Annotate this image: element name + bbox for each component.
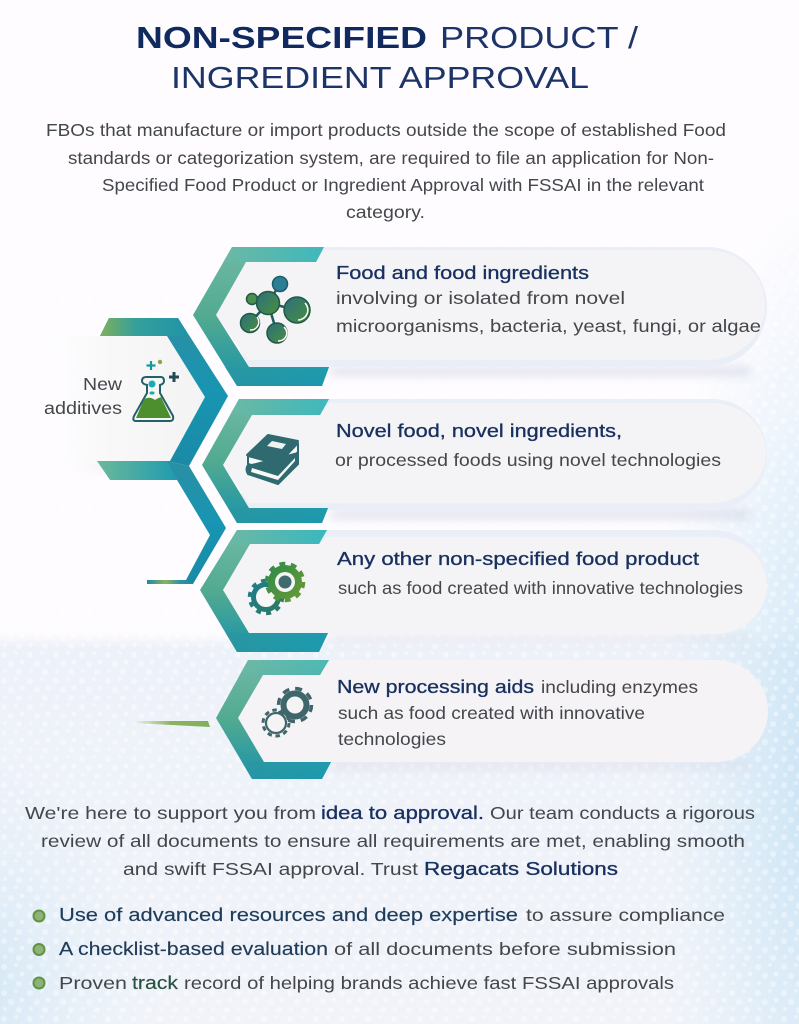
intro paragraph: standards or categorization system, are required to file an application for Non-: [68, 148, 714, 168]
text: new processing aids: including enzymes: [541, 677, 698, 697]
hexagon bracket: new additives: [97, 318, 228, 480]
connector chevron: [147, 461, 226, 584]
panel: other non-specified food product: [200, 530, 767, 652]
label: new additives: New: [83, 374, 122, 394]
text: other non-specified: such as food created with innovative technologies: [338, 578, 743, 598]
bullet: checklist evaluation: of all documents before submission: [334, 939, 676, 959]
support paragraph: Our team conducts a rigorous: [490, 803, 755, 823]
text: novel food: or processed foods using novel technologies: [335, 450, 721, 470]
card shadow: [330, 763, 750, 768]
text: new processing aids: such as food created with innovative: [338, 703, 645, 723]
pill: [223, 399, 767, 510]
support paragraph: Regacats Solutions: [424, 859, 618, 879]
hexagon frame: [200, 530, 328, 652]
card shadow: [330, 368, 750, 375]
bullet: advanced resources: [34, 905, 725, 925]
bullet: track record: record of helping brands achieve fast FSSAI approvals: [184, 973, 674, 993]
text: novel food: [335, 421, 721, 470]
text: novel food: Novel food, novel ingredients,: [336, 421, 622, 441]
intro paragraph: FBOs that manufacture or import products outside the scope of established Food: [46, 120, 726, 140]
bullet: track record: track: [132, 973, 179, 993]
panel: new additives: [30, 318, 228, 584]
text: other non-specified: [337, 549, 743, 598]
icon: gears: [250, 564, 304, 614]
card shadow: [330, 511, 750, 518]
support paragraph: [25, 803, 755, 879]
icon: molecule: [240, 276, 310, 343]
text: new processing aids: New processing aids: [337, 677, 534, 697]
icon: flask: [133, 360, 179, 421]
pill: [238, 660, 768, 762]
bullet: track record: Proven: [59, 973, 127, 993]
pill: [223, 530, 767, 634]
intro paragraph: Specified Food Product or Ingredient Approval with FSSAI in the relevant: [102, 175, 704, 195]
title: INGREDIENT APPROVAL: [171, 60, 589, 95]
text: new processing aids: [337, 677, 698, 749]
bullet: checklist evaluation: [34, 939, 676, 959]
support paragraph: and swift FSSAI approval. Trust: [123, 859, 418, 879]
text: food and food ingredients: [336, 263, 761, 336]
pill: [216, 247, 767, 367]
panel: food and food ingredients: [193, 247, 767, 386]
support paragraph: We're here to support you from: [25, 803, 316, 823]
card shadow: [330, 635, 750, 640]
hexagon frame: [202, 399, 329, 523]
text: other non-specified: Any other non-specified food product: [337, 549, 699, 569]
intro paragraph: [46, 120, 726, 222]
title: PRODUCT /: [440, 20, 638, 55]
icon: gears outline: [263, 688, 312, 736]
bullet: advanced resources: to assure compliance: [526, 905, 725, 925]
icon: books: [246, 435, 298, 484]
support paragraph: review of all documents to ensure all requirements are met, enabling smooth: [41, 831, 745, 851]
label: new additives: additives: [44, 398, 122, 418]
connector stub: [147, 580, 193, 584]
hexagon frame: [216, 660, 331, 779]
label: new additives: [44, 374, 122, 418]
title: NON-SPECIFIED: [136, 20, 427, 55]
text: food and food ingredients: microorganisms, bacteria, yeast, fungi, or algae: [336, 316, 761, 336]
support paragraph: idea to approval.: [321, 803, 484, 823]
connector stub: [133, 721, 210, 727]
intro paragraph: category.: [346, 202, 425, 222]
text: food and food ingredients: Food and food ingredients: [336, 263, 589, 283]
bullet list: [34, 905, 725, 993]
title: [136, 20, 638, 95]
text: food and food ingredients: involving or isolated from novel: [336, 288, 625, 308]
text: new processing aids: technologies: [338, 729, 446, 749]
bullet: advanced resources: Use of advanced resources and deep expertise: [59, 905, 518, 925]
bullet: checklist evaluation: A checklist-based evaluation: [59, 939, 328, 959]
bullet: track record: [34, 973, 674, 993]
panel: new processing aids: [133, 660, 768, 779]
panel: novel food: [202, 399, 767, 523]
hexagon frame: [193, 247, 329, 386]
